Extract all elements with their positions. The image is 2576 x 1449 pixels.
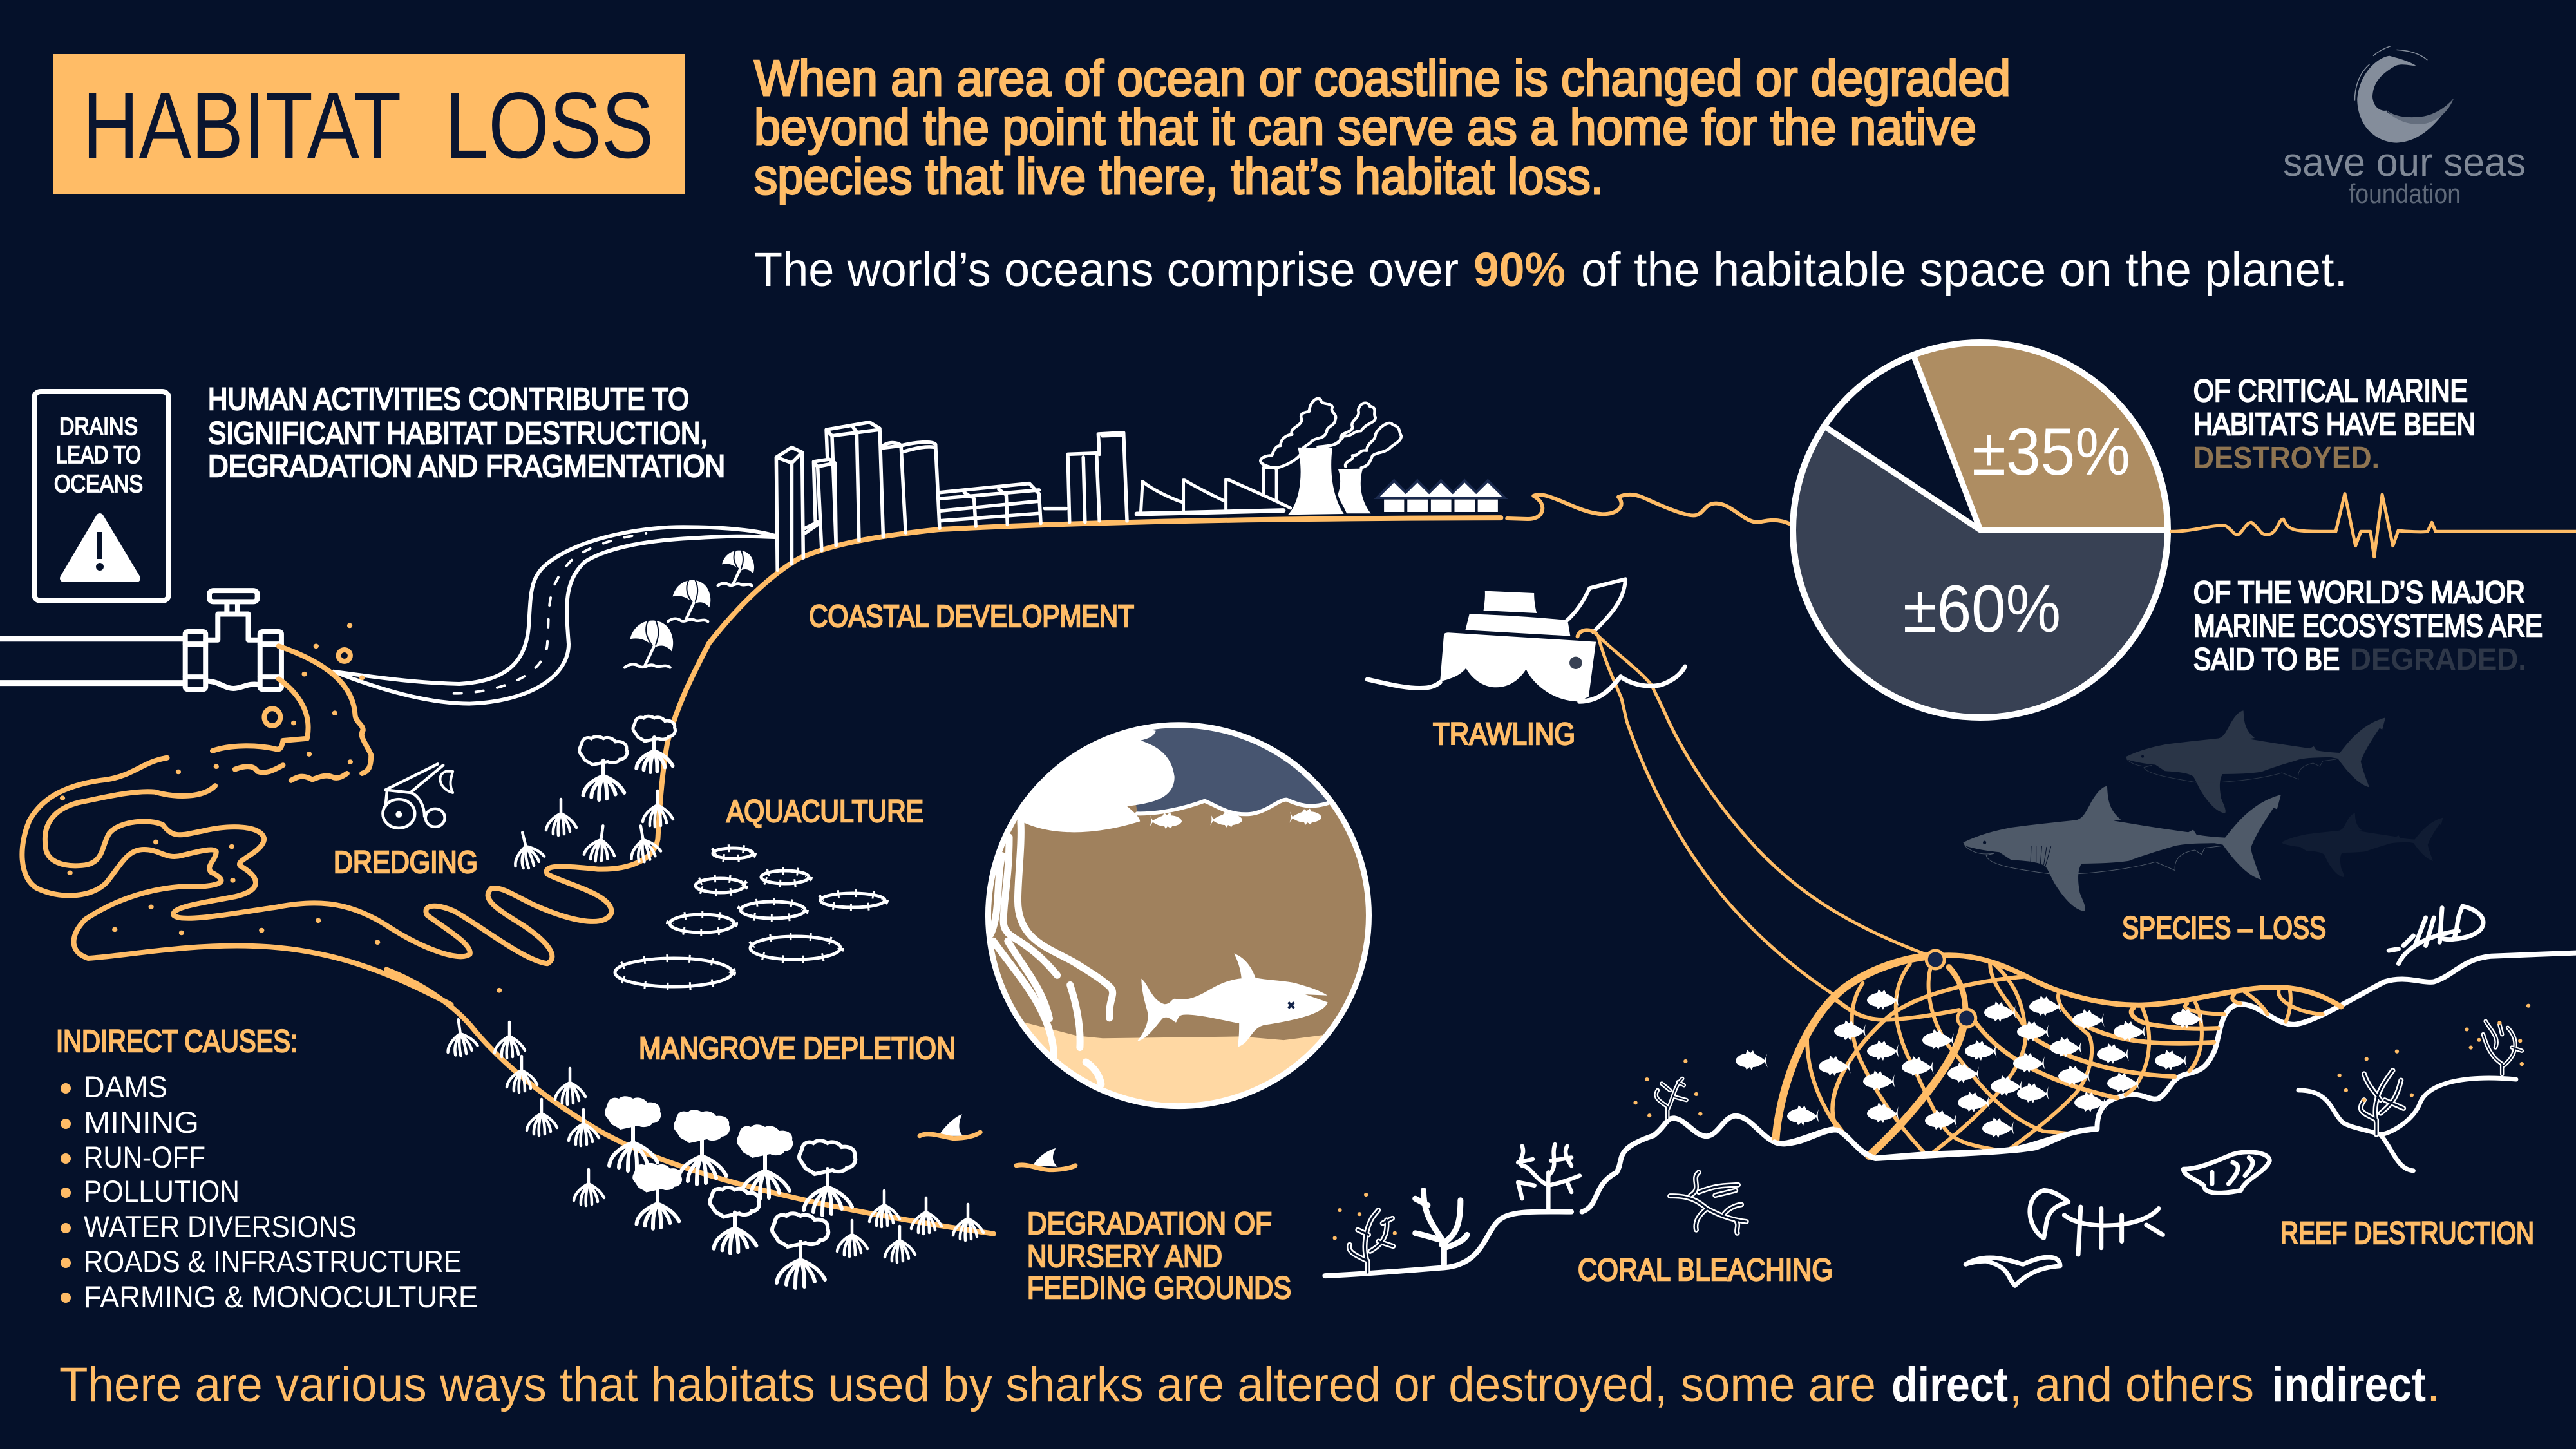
pie caption: destroyed: HABITATS HAVE BEEN bbox=[2193, 408, 2476, 442]
pie caption: degraded: OF THE WORLD’S MAJOR bbox=[2193, 576, 2525, 610]
shark fins bbox=[920, 1114, 1075, 1170]
sign: drains lead to oceans: OCEANS bbox=[54, 471, 143, 498]
sign: drains lead to oceans: LEAD TO bbox=[56, 442, 141, 469]
sign: drains lead to oceans bbox=[34, 392, 169, 601]
indirect causes list: MINING bbox=[84, 1105, 199, 1139]
bottom sentence: indirect bbox=[2272, 1358, 2426, 1412]
statistic sentence bbox=[754, 243, 2347, 296]
intro definition text: species that live there, that’s habitat loss. bbox=[754, 148, 1604, 205]
human activities text: SIGNIFICANT HABITAT DESTRUCTION, bbox=[208, 417, 708, 451]
intro definition text: beyond the point that it can serve as a home for the native bbox=[754, 99, 1976, 155]
logo: save our seas foundation bbox=[2283, 46, 2526, 209]
human activities text: HUMAN ACTIVITIES CONTRIBUTE TO bbox=[208, 383, 689, 417]
label: degradation of nursery and feeding grounds: DEGRADATION OF bbox=[1027, 1207, 1272, 1241]
trawling boat bbox=[1367, 579, 1685, 701]
indirect causes list: POLLUTION bbox=[84, 1174, 240, 1208]
trawl net bbox=[1774, 951, 2341, 1158]
label: coastal development: COASTAL DEVELOPMENT bbox=[809, 600, 1134, 634]
aquaculture pens bbox=[615, 848, 885, 987]
pie caption: degraded bbox=[2193, 576, 2543, 677]
fish in net bbox=[1736, 989, 2203, 1138]
human activities text bbox=[208, 383, 725, 484]
indirect causes list: RUN-OFF bbox=[84, 1140, 205, 1174]
pie chart bbox=[1793, 343, 2168, 717]
seabed line bbox=[1325, 953, 2576, 1276]
indirect causes list: WATER DIVERSIONS bbox=[84, 1209, 357, 1244]
pie chart: ±60% bbox=[1903, 572, 2061, 647]
label: degradation of nursery and feeding grounds: FEEDING GROUNDS bbox=[1027, 1271, 1291, 1305]
label: degradation of nursery and feeding grounds: NURSERY AND bbox=[1027, 1240, 1222, 1274]
label: mangrove depletion: MANGROVE DEPLETION bbox=[639, 1032, 956, 1066]
pie caption: degraded: SAID TO BE bbox=[2193, 643, 2340, 677]
upper coastline bbox=[708, 518, 1501, 644]
intro definition text bbox=[754, 50, 2011, 205]
logo: save our seas foundation: foundation bbox=[2349, 178, 2461, 209]
beach umbrellas bbox=[625, 550, 754, 667]
indirect causes list: DAMS bbox=[84, 1070, 167, 1104]
label: aquaculture: AQUACULTURE bbox=[726, 795, 923, 829]
bottom sentence: There are various ways that habitats used by sharks are altered or destroyed, some are bbox=[59, 1358, 1876, 1412]
corals bbox=[1333, 1004, 2530, 1273]
indirect causes list: ROADS & INFRASTRUCTURE bbox=[84, 1244, 462, 1278]
statistic sentence: of the habitable space on the planet. bbox=[1581, 243, 2347, 296]
bottom sentence: , and others bbox=[2009, 1358, 2254, 1412]
label: species loss: SPECIES – LOSS bbox=[2122, 911, 2326, 945]
label: coral bleaching: CORAL BLEACHING bbox=[1578, 1253, 1833, 1287]
indirect causes list: INDIRECT CAUSES: bbox=[56, 1025, 298, 1059]
wave line between coast and pie bbox=[1507, 495, 1791, 524]
pie caption: degraded: DEGRADED. bbox=[2350, 643, 2526, 677]
pie caption: destroyed: OF CRITICAL MARINE bbox=[2193, 374, 2468, 408]
dredger bbox=[383, 764, 453, 828]
fish skeletons and shell bbox=[1965, 906, 2483, 1285]
pie caption: destroyed: DESTROYED. bbox=[2193, 441, 2380, 475]
bottom sentence: direct bbox=[1891, 1358, 2008, 1412]
mangrove trees and saplings bbox=[444, 716, 983, 1288]
lower coastline through mangroves bbox=[386, 969, 994, 1234]
logo: save our seas foundation: save our seas bbox=[2283, 140, 2526, 185]
indirect causes list: FARMING & MONOCULTURE bbox=[84, 1280, 478, 1314]
label: trawling: TRAWLING bbox=[1433, 717, 1575, 752]
indirect causes list bbox=[56, 1025, 478, 1314]
pipe, valve and road bbox=[0, 527, 777, 704]
heartbeat line bbox=[2172, 494, 2576, 557]
intro definition text: When an area of ocean or coastline is changed or degraded bbox=[754, 50, 2011, 106]
sludge and estuary outline bbox=[22, 623, 708, 1005]
small fish in circle bbox=[1150, 808, 1321, 829]
human activities text: DEGRADATION AND FRAGMENTATION bbox=[208, 450, 725, 484]
nursery circle with shark bbox=[982, 719, 1385, 1129]
houses bbox=[1374, 478, 1508, 512]
skyline buildings and factory bbox=[776, 399, 1401, 570]
title box: HABITAT LOSS bbox=[82, 73, 654, 178]
pie chart: ±35% bbox=[1972, 415, 2130, 489]
species loss sharks bbox=[1963, 710, 2443, 911]
statistic sentence: The world’s oceans comprise over bbox=[754, 243, 1459, 296]
label: dredging: DREDGING bbox=[334, 846, 478, 880]
bottom sentence: . bbox=[2427, 1358, 2440, 1412]
statistic sentence: 90% bbox=[1473, 243, 1566, 296]
trawl cables bbox=[1596, 634, 1924, 995]
pie caption: destroyed bbox=[2193, 374, 2476, 475]
label: degradation of nursery and feeding grounds bbox=[1027, 1207, 1291, 1305]
sign: drains lead to oceans: DRAINS bbox=[59, 413, 138, 440]
title box bbox=[53, 54, 685, 194]
